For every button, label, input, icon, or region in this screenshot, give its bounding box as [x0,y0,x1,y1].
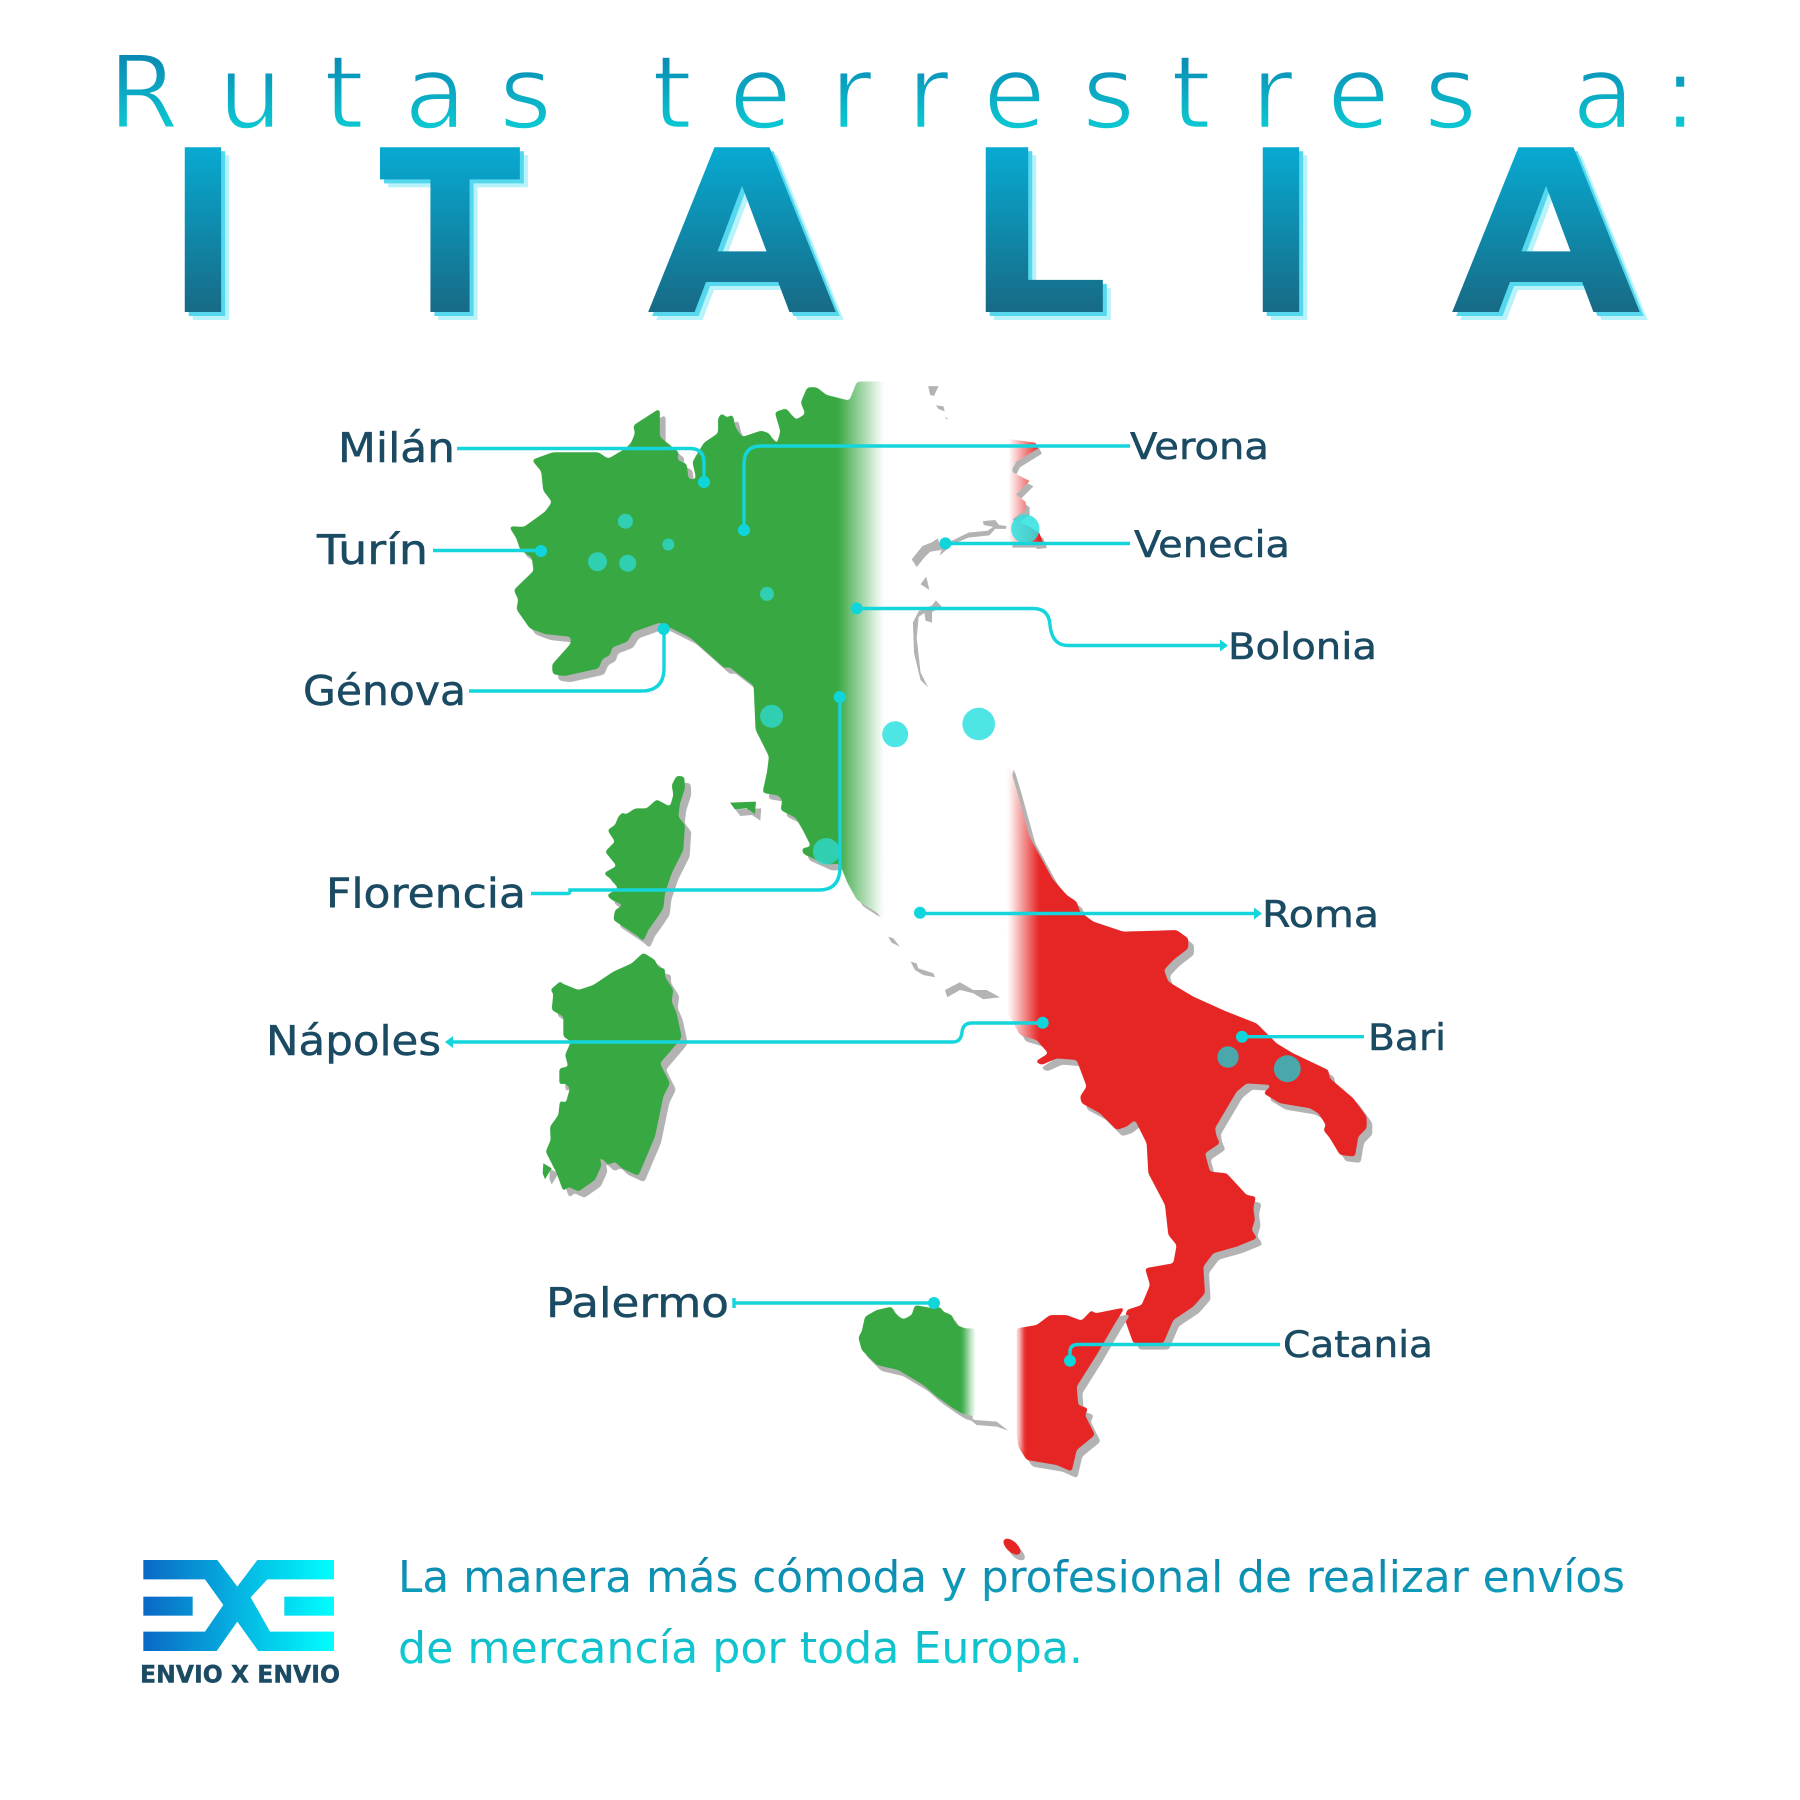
label: Palermo [546,1279,940,1327]
title: ITALIA: T [379,103,521,366]
label: Venecia [939,523,1290,566]
label: Verona: Verona [1130,425,1269,468]
region: southern coast shadows [888,937,1000,999]
label: Turín [316,526,547,574]
region: central coast shadows [912,386,1047,688]
label: Catania: Catania [1283,1323,1433,1366]
label: Roma: Roma [1262,893,1379,936]
region: Corsica, Sardinia and Elba [543,776,761,1198]
label: Nápoles: Nápoles [266,1017,441,1065]
tagline: La manera más cómoda y profesional de realizar envíos [398,1553,1625,1603]
region: north-east tip (red) [1009,439,1047,548]
tagline: de mercancía por toda Europa. [398,1624,1083,1674]
label: Turín: Turín [316,526,428,574]
title: Rutas terrestres a:: Rutas terrestres a: [108,34,1697,153]
label: Nápoles [266,1017,1049,1065]
title: ITALIA: I [1245,103,1317,366]
region: Malta [1001,1536,1027,1563]
region: Sicily [858,1305,1131,1478]
label: Roma [914,893,1379,936]
map of Italy [509,381,1372,1563]
title: ITALIA: L [965,103,1109,366]
title: ITALIA: A [1451,103,1641,366]
label: Milán: Milán [338,424,455,472]
logo wordmark: ENVIO X ENVIO [140,1661,340,1689]
label: Catania [1064,1323,1433,1367]
region: northern mainland (green) [509,381,891,935]
icon: EXE mark [143,1560,334,1651]
label: Génova [303,623,670,715]
tagline [398,1553,1625,1674]
label: Bolonia: Bolonia [1228,625,1377,668]
label: Milán [338,424,710,488]
label: Florencia: Florencia [326,870,526,918]
label: Génova: Génova [303,667,466,715]
label: Bari: Bari [1368,1016,1446,1059]
logo: Envio x Envio [140,1560,340,1689]
route hubs: translucent circles [588,514,1301,1082]
label: Bolonia [851,602,1377,668]
title: ITALIA: I [167,103,239,366]
label: Palermo: Palermo [546,1279,729,1327]
title: ITALIA: A [647,103,837,366]
label: Venecia: Venecia [1134,523,1290,566]
label: Verona [738,425,1269,536]
label: Florencia [326,691,846,918]
label: Bari [1236,1016,1446,1059]
region: southern mainland (red) [1007,757,1372,1350]
